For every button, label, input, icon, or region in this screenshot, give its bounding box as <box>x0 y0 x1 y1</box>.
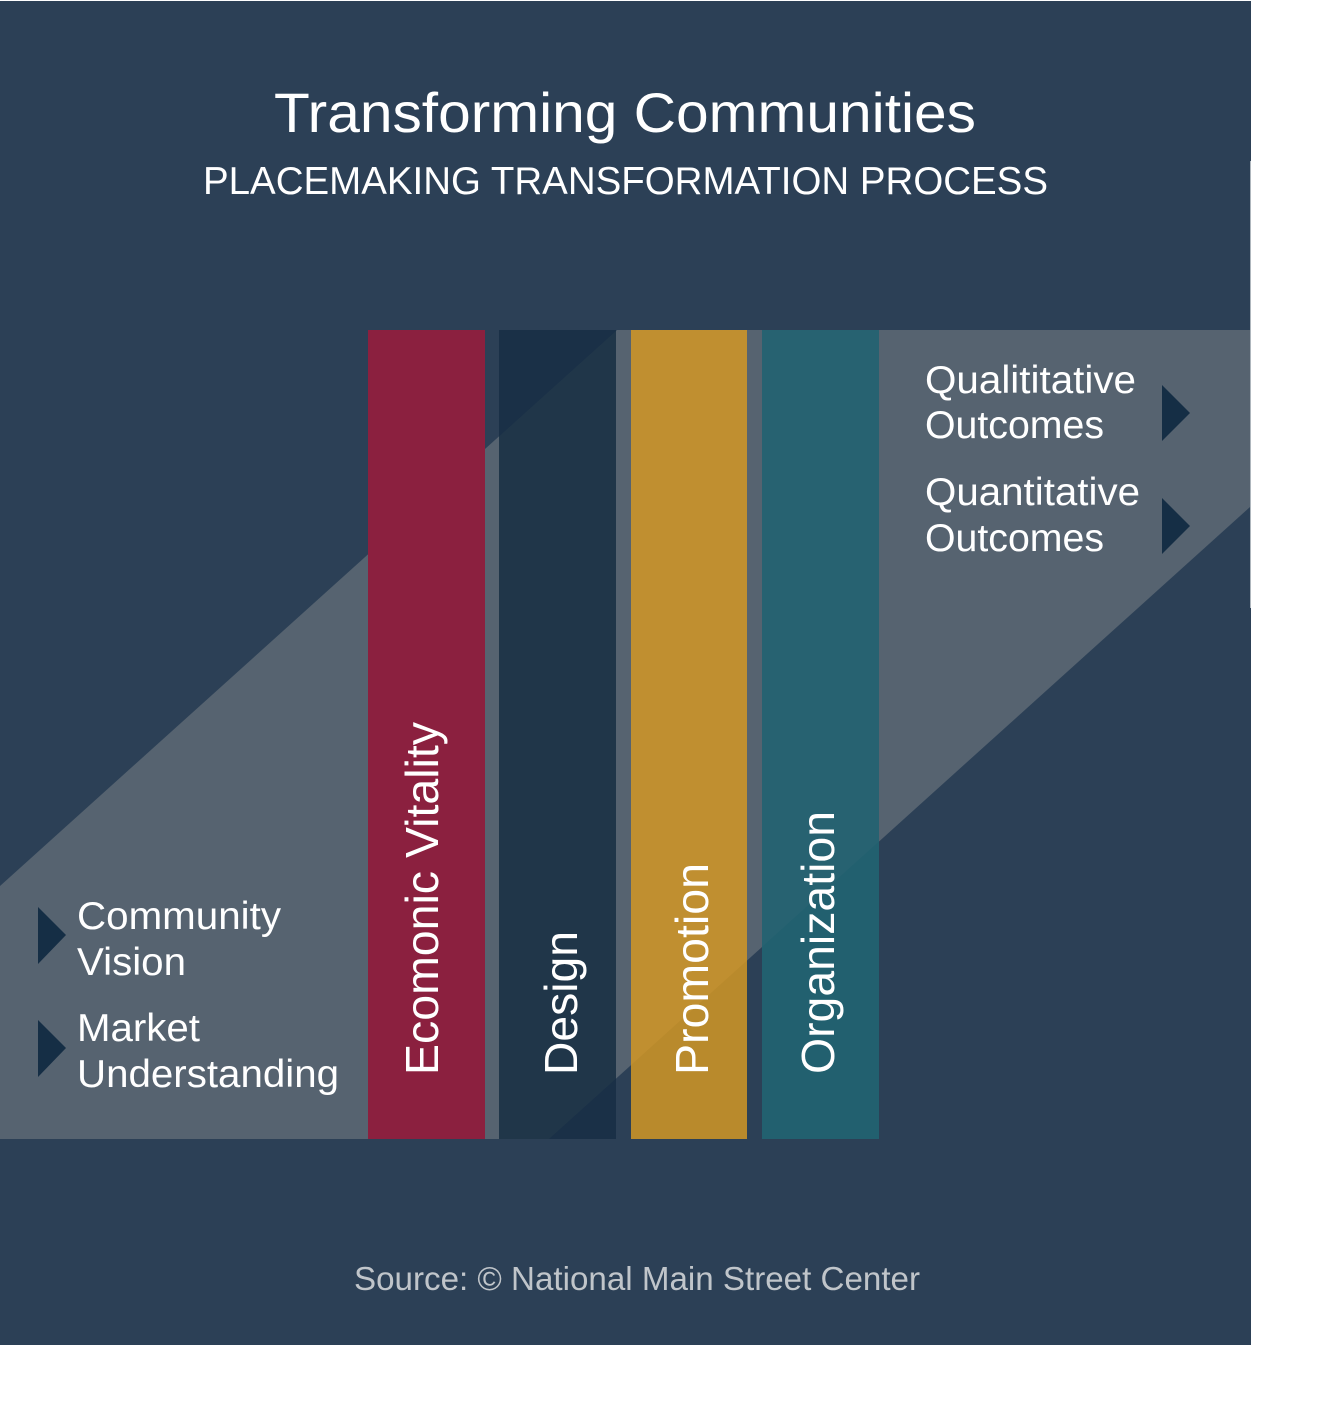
inputs: market understanding <box>38 1007 339 1096</box>
label: Qualititative Outcomes: Qualititative <box>925 359 1136 402</box>
label: Market Understanding: Market <box>77 1007 200 1050</box>
bar: Promotion: Promotion <box>666 863 718 1075</box>
label: Quantitative Outcomes: Quantitative <box>925 471 1140 514</box>
label: Community Vision: Vision <box>77 941 186 984</box>
diagonal transformation band <box>0 330 1250 1139</box>
icon: arrow <box>1162 385 1190 441</box>
icon: arrow <box>1162 498 1190 554</box>
bar: Economic Vitality <box>368 330 485 1139</box>
bar: Economic Vitality: Ecomonic Vitality <box>396 722 448 1075</box>
bar: Organization: Organization <box>792 811 844 1074</box>
label: Market Understanding: Understanding <box>77 1053 339 1096</box>
icon: arrow <box>38 907 66 964</box>
bar: Design: Design <box>535 931 587 1075</box>
bar: Design <box>499 330 616 1139</box>
subtitle: PLACEMAKING TRANSFORMATION PROCESS <box>203 160 1048 203</box>
outputs: qualitative outcomes <box>925 359 1190 447</box>
bar: Organization <box>762 330 879 1139</box>
icon: arrow <box>38 1020 66 1077</box>
outputs: quantitative outcomes <box>925 471 1190 560</box>
bar: Promotion <box>631 330 747 1139</box>
label: Quantitative Outcomes: Outcomes <box>925 517 1104 560</box>
label: Community Vision: Community <box>77 895 282 938</box>
title: Transforming Communities <box>274 81 976 144</box>
label: Qualititative Outcomes: Outcomes <box>925 404 1104 447</box>
inputs: community vision <box>38 895 292 984</box>
source note: Source: © National Main Street Center <box>354 1260 920 1297</box>
